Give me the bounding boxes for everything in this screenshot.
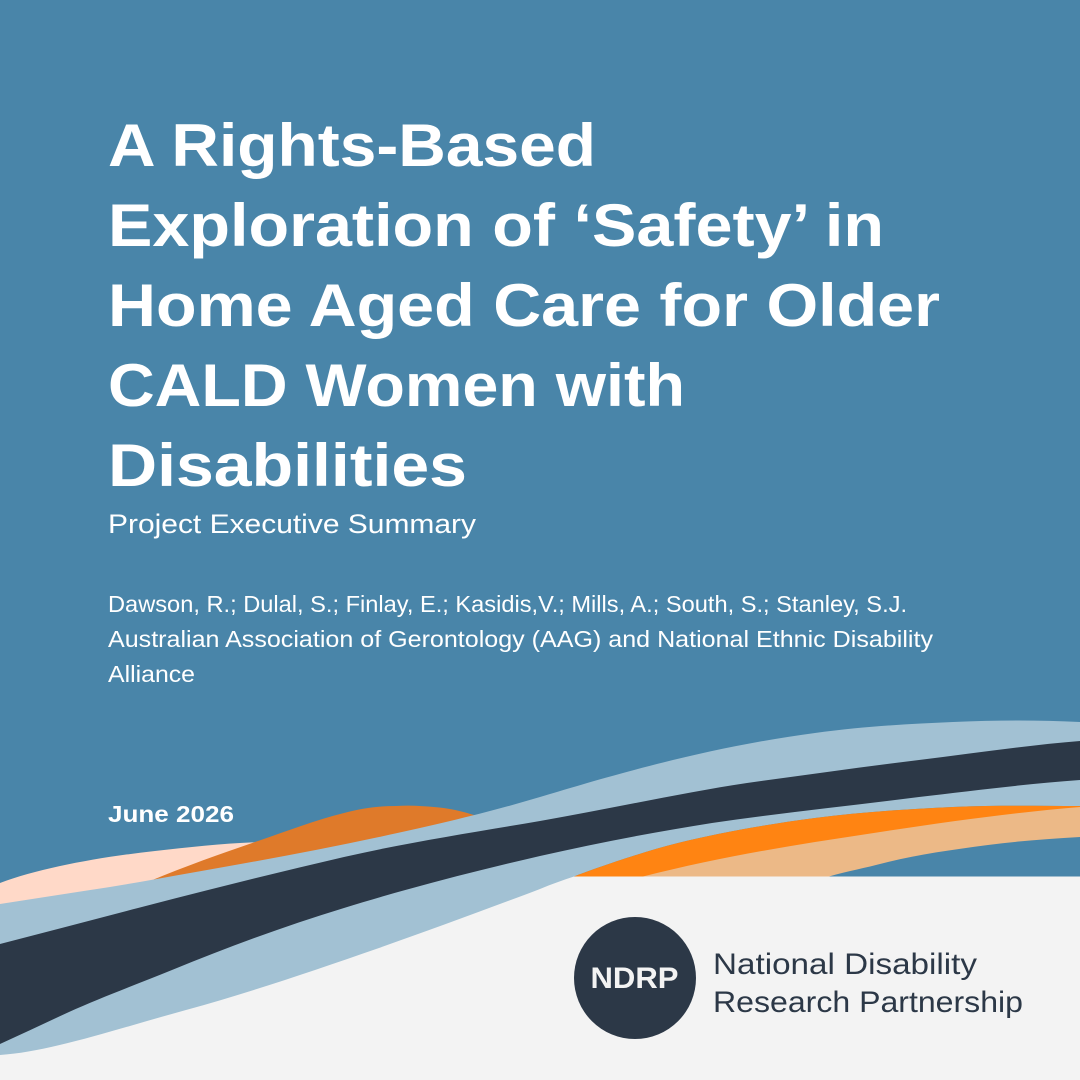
wave: light blue band [0, 720, 1080, 1055]
title: CALD Women with [108, 352, 685, 419]
authors and organisations: Australian Association of Gerontology (AAG) and National Ethnic Disability [108, 626, 934, 652]
wave: tan [643, 807, 1080, 876]
title: Disabilities [108, 432, 467, 499]
logo wordmark: National Disability [713, 948, 977, 981]
date: June 2026 [108, 801, 234, 827]
subtitle: Project Executive Summary [108, 509, 477, 539]
authors and organisations: Dawson, R.; Dulal, S.; Finlay, E.; Kasidis,V.; Mills, A.; South, S.; Stanley, S.J. [108, 591, 907, 617]
footer panel [0, 876, 1080, 1080]
wave: dark orange [150, 806, 477, 885]
wave: dark navy band [0, 741, 1080, 1044]
wave: bright orange [574, 806, 1080, 876]
logo [574, 917, 1023, 1039]
logo badge [574, 917, 696, 1039]
authors and organisations [108, 591, 934, 687]
authors and organisations: Alliance [108, 661, 195, 687]
title: Home Aged Care for Older [108, 272, 940, 339]
wave graphic [0, 720, 1080, 1080]
title [108, 112, 940, 499]
logo wordmark [713, 948, 1023, 1019]
title: A Rights-Based [108, 112, 596, 179]
title: Exploration of ‘Safety’ in [108, 192, 884, 259]
logo wordmark: Research Partnership [713, 986, 1023, 1019]
logo initials: NDRP [590, 962, 678, 995]
wave: pale peach [0, 842, 262, 910]
